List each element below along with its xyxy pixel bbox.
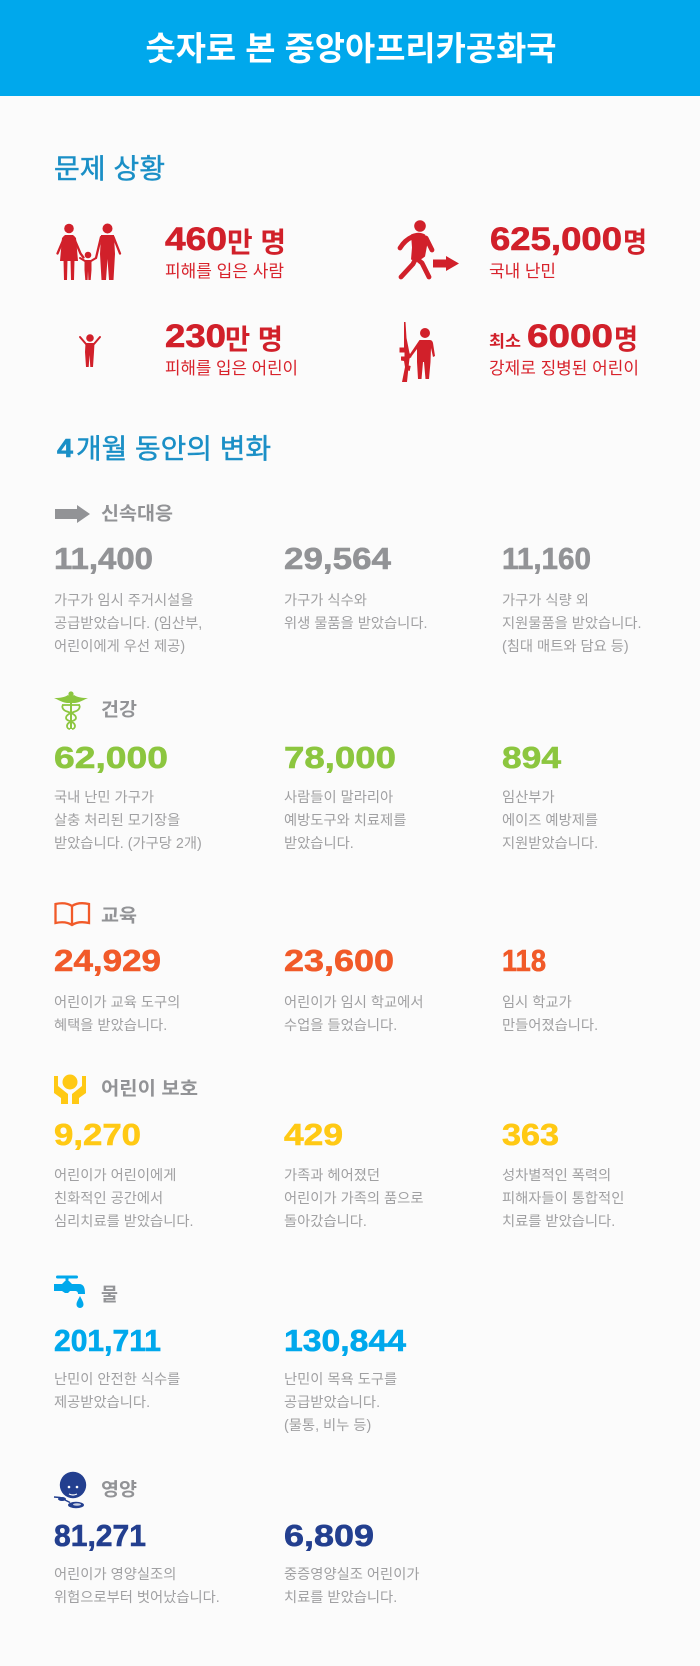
stat 1: [54, 1117, 193, 1230]
panel: child protection: [54, 1074, 624, 1230]
stat 3: 11,160: [502, 541, 591, 576]
stat 1: 제공받았습니다.: [54, 1394, 150, 1411]
stat 2: 난민이 목욕 도구를: [284, 1371, 397, 1388]
stat 3: 치료를 받았습니다.: [502, 1213, 615, 1230]
label: conscripted children: 강제로 징병된 어린이: [489, 358, 639, 378]
heading: 건강: [101, 699, 137, 720]
stat 1: 62,000: [54, 740, 168, 775]
stat 2: 어린이가 가족의 품으로: [284, 1190, 423, 1207]
stat 2: 사람들이 말라리아: [284, 789, 393, 806]
stat 3: 894: [502, 740, 562, 775]
stat 2: 130,844: [284, 1323, 407, 1358]
stat 1: 어린이에게 우선 제공): [54, 638, 185, 655]
stat 2: 돌아갔습니다.: [284, 1213, 367, 1230]
stat 2: 수업을 들었습니다.: [284, 1017, 397, 1034]
stat 3: 에이즈 예방제를: [502, 812, 598, 829]
panel: nutrition: [54, 1472, 420, 1606]
unit: 명: 명: [614, 324, 638, 355]
stat 2: 중증영양실조 어린이가: [284, 1566, 420, 1583]
stat 2: 29,564: [284, 541, 392, 576]
stat 2: 429: [284, 1117, 343, 1152]
number: 6000: 6000: [527, 318, 613, 354]
stat 3: [502, 541, 641, 655]
heading: 영양: [101, 1479, 137, 1500]
stat 2: 가구가 식수와: [284, 592, 367, 609]
header banner: 숫자로 본 중앙아프리카공화국: [146, 30, 556, 67]
stat 1: [54, 1323, 180, 1411]
panel: education: [54, 903, 598, 1034]
stat 2: (물통, 비누 등): [284, 1417, 371, 1434]
stat 2: [284, 740, 406, 852]
stat 2: [284, 541, 427, 632]
stat 2: [284, 1323, 407, 1434]
stat 2: 공급받았습니다.: [284, 1394, 380, 1411]
panel: rapid response: [54, 503, 641, 655]
panel: water: [54, 1276, 407, 1434]
icon: hands holding a circle: [54, 1074, 86, 1104]
stat 1: [54, 740, 202, 852]
stat 1: 24,929: [54, 943, 161, 978]
stat 2: 치료를 받았습니다.: [284, 1589, 397, 1606]
heading: 신속대응: [101, 503, 173, 524]
icon: walking person with arrow: [400, 220, 459, 277]
header banner: [0, 0, 700, 96]
stat 3: 만들어졌습니다.: [502, 1017, 598, 1034]
icon: open book: [56, 903, 89, 925]
stat 3: 118: [502, 943, 546, 978]
stat 2: [284, 1117, 423, 1230]
icon: tap with water drop: [54, 1276, 85, 1308]
icon: child face with spoon and plate: [54, 1472, 86, 1508]
stat 3: 피해자들이 통합적인: [502, 1190, 624, 1207]
stat 3: 임산부가: [502, 789, 555, 806]
icon: child soldier with rifle: [400, 322, 435, 382]
number: 2.3 million: 230: [165, 318, 226, 354]
stat 3: [502, 943, 598, 1034]
stat 1: 어린이가 영양실조의: [54, 1566, 176, 1583]
stat 1: 81,271: [54, 1518, 146, 1553]
stat 2: 가족과 헤어졌던: [284, 1167, 380, 1184]
stat 1: [54, 943, 180, 1034]
unit: 만 명: 만 명: [227, 227, 286, 258]
stat 2: 어린이가 임시 학교에서: [284, 994, 423, 1011]
stat 1: 국내 난민 가구가: [54, 789, 154, 806]
stat 2: [284, 943, 423, 1034]
heading: changes over four months: 4: [57, 433, 74, 463]
stat 1: 친화적인 공간에서: [54, 1190, 163, 1207]
heading: 교육: [101, 905, 137, 926]
stat 1: 공급받았습니다. (임산부,: [54, 615, 202, 632]
stat 3: [502, 1117, 624, 1230]
stat 1: 받았습니다. (가구당 2개): [54, 835, 202, 852]
stat 2: [284, 1518, 420, 1606]
stat 2: 6,809: [284, 1518, 374, 1553]
label: affected people: 피해를 입은 사람: [165, 261, 284, 281]
stat 3: [502, 740, 598, 852]
unit: 명: 명: [623, 227, 647, 258]
stat 1: 위험으로부터 벗어났습니다.: [54, 1589, 220, 1606]
stat 1: 11,400: [54, 541, 153, 576]
stat 1: 난민이 안전한 식수를: [54, 1371, 180, 1388]
stat 3: 임시 학교가: [502, 994, 572, 1011]
heading: 어린이 보호: [101, 1078, 198, 1099]
stat 1: 어린이가 어린이에게: [54, 1167, 176, 1184]
stat 3: 성차별적인 폭력의: [502, 1167, 611, 1184]
heading: changes over four months: 개월 동안의 변화: [76, 433, 271, 464]
panel: health: [54, 691, 598, 852]
heading: problem situation: 문제 상황: [54, 153, 165, 184]
icon: family: [58, 224, 120, 280]
icon: arrow: [55, 505, 90, 523]
stat 1: 9,270: [54, 1117, 141, 1152]
number: 625,000: 625,000: [490, 221, 622, 257]
stat 2: 23,600: [284, 943, 394, 978]
qualifier: 최소: 최소: [489, 332, 521, 351]
heading: 물: [101, 1284, 118, 1305]
stat 3: 지원물품을 받았습니다.: [502, 615, 641, 632]
stat 3: 가구가 식량 외: [502, 592, 589, 609]
stat 1: [54, 1518, 220, 1606]
number: 4.6 million: 460: [165, 221, 227, 257]
stat 3: 363: [502, 1117, 559, 1152]
icon: caduceus: [54, 691, 88, 729]
label: internally displaced: 국내 난민: [489, 261, 556, 281]
label: affected children: 피해를 입은 어린이: [165, 358, 298, 378]
stat 2: 예방도구와 치료제를: [284, 812, 406, 829]
stat 2: 받았습니다.: [284, 835, 354, 852]
stat 1: 심리치료를 받았습니다.: [54, 1213, 193, 1230]
stat 3: (침대 매트와 담요 등): [502, 638, 629, 655]
stat 1: 혜택을 받았습니다.: [54, 1017, 167, 1034]
stat 1: 201,711: [54, 1323, 161, 1358]
stat 2: 78,000: [284, 740, 396, 775]
stat 1: 가구가 임시 주거시설을: [54, 592, 193, 609]
stat 3: 지원받았습니다.: [502, 835, 598, 852]
panel: situation stats: [58, 220, 647, 382]
stat 1: 살충 처리된 모기장을: [54, 812, 180, 829]
unit: 만 명: 만 명: [225, 324, 283, 355]
stat 1: 어린이가 교육 도구의: [54, 994, 180, 1011]
stat 2: 위생 물품을 받았습니다.: [284, 615, 427, 632]
stat 1: [54, 541, 202, 655]
icon: child: [80, 334, 100, 367]
